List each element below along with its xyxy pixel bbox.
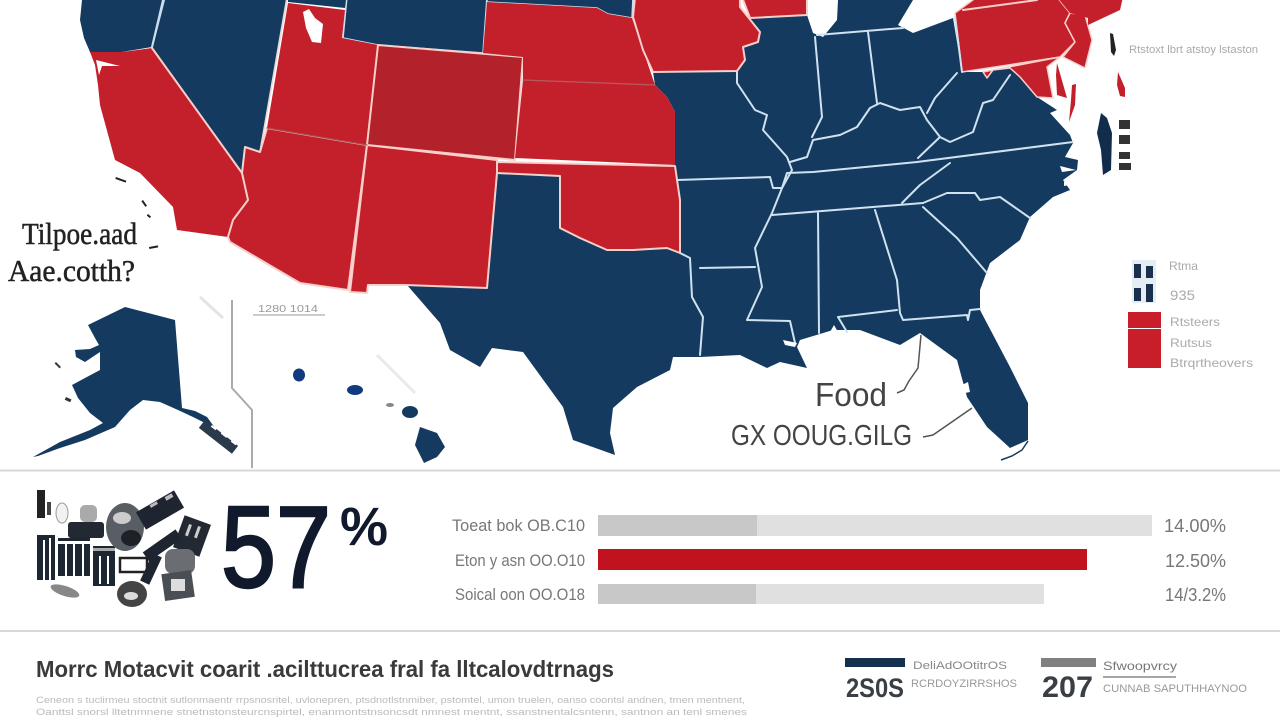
bar chart xyxy=(452,515,1226,605)
bar row 3 xyxy=(455,584,1226,605)
big number: 57%: 57 xyxy=(221,482,331,612)
inset caption: 1280 1014 xyxy=(258,304,319,315)
states: navy east and south xyxy=(407,0,1078,455)
callout: food label with leader lines: Food xyxy=(815,376,887,413)
legend: map key xyxy=(1128,259,1253,370)
footer stat: 207: Sfwoopvrcy xyxy=(1103,659,1177,673)
legend swatch: red xyxy=(1128,312,1161,368)
footer stat: 207: CUNNAB SAPUTHHAYNOO xyxy=(1103,683,1247,695)
state borders xyxy=(152,0,1073,355)
inset caption xyxy=(253,304,325,315)
map: contiguous United States xyxy=(80,0,1131,460)
footer body text xyxy=(36,695,748,717)
bar row 3: 14/3.2% xyxy=(1165,585,1226,605)
states: red northeast xyxy=(955,0,1123,122)
footer stat: 2S0S: DeliAdOOtitrOS xyxy=(913,660,1007,672)
footer body text: Ceneon s tuclirmeu stoctnit sutlonmaentr rrpsnosritel, uvlonepren, ptsdnotlstnmiber, pstomtel, umon truelen, oanso coontsl andnen, tmen mentnent, xyxy=(36,695,745,705)
Florida Keys xyxy=(1001,441,1028,460)
legend labels: Rutsus xyxy=(1170,336,1212,350)
packages: center xyxy=(106,503,144,551)
bar row 1: 14.00% xyxy=(1164,516,1226,536)
bar row 3: Soical oon OO.O18 xyxy=(455,585,585,604)
inset divider xyxy=(232,300,252,468)
footer stat: 2S0S xyxy=(845,658,1017,703)
bar row 2: Eton y asn OO.O10 xyxy=(455,551,585,570)
bar row 1 xyxy=(452,515,1226,536)
icon: pile of food packages xyxy=(37,490,211,607)
legend labels xyxy=(1169,259,1253,370)
callout: food label with leader lines xyxy=(731,335,972,452)
footer body text: Oanttsl snorsl lltetnmnene stnetnstonsteurcnspirtel, enanmontstnsoncsdt nmnest mentnt, ssanstnentalcsntenn, santnon an tenl smenes xyxy=(36,707,748,717)
legend swatch: navy pattern xyxy=(1132,260,1156,303)
lakes and coastal inlets xyxy=(96,9,1076,393)
bar row 2: 12.50% xyxy=(1165,551,1226,571)
states: red west and plains xyxy=(90,0,807,293)
legend labels: Rtsteers xyxy=(1170,315,1220,329)
legend labels: Btrqrtheovers xyxy=(1170,356,1253,370)
offshore islands: Atlantic xyxy=(1097,33,1131,175)
inset: Hawaii xyxy=(293,368,445,463)
bar row 1: Toeat bok OB.C10 xyxy=(452,516,585,535)
footer stat: 2S0S: RCRDOYZIRRSHOS xyxy=(911,678,1017,690)
callout: food label with leader lines: GX OOUG.GILG xyxy=(731,420,912,452)
legend labels: Rtma xyxy=(1169,259,1198,273)
states: navy west xyxy=(80,0,633,173)
legend labels: 935 xyxy=(1170,287,1195,303)
inset: Alaska xyxy=(33,307,238,457)
bar row 2 xyxy=(455,549,1226,571)
packages: striped left xyxy=(37,535,55,580)
map label: left: Aae.cotth? xyxy=(8,253,135,288)
footer stat: 207: 207 xyxy=(1042,671,1093,704)
offshore islands: California xyxy=(115,177,158,249)
map label: left xyxy=(8,216,137,288)
legend: top right note: Rtstoxt lbrt atstoy lstaston xyxy=(1129,44,1258,56)
footer heading: Morrc Motacvit coarit .acilttucrea fral fa lltcalovdtrnags xyxy=(36,656,614,682)
map label: left: Tilpoe.aad xyxy=(22,216,137,251)
big number: 57%: % xyxy=(340,497,388,557)
footer stat: 207 xyxy=(1041,658,1247,704)
footer stat: 2S0S: 2S0S xyxy=(846,673,904,703)
section dividers xyxy=(0,470,1280,472)
